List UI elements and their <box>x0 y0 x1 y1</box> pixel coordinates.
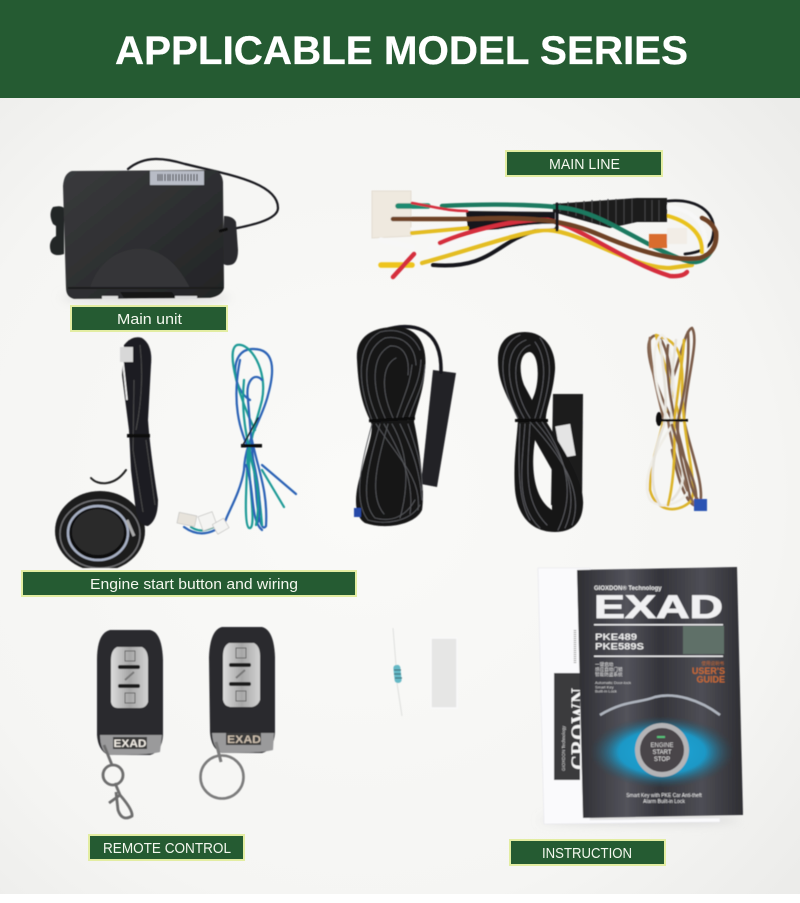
label: instruction: INSTRUCTION <box>542 845 632 862</box>
cover: Smart Key <box>595 684 614 690</box>
label: main line: MAIN LINE <box>549 156 620 173</box>
guide title: 使用说明书 <box>702 660 724 667</box>
label: main unit <box>71 306 227 331</box>
car thumbnail <box>683 626 724 654</box>
cover brand line: GIOXDON® Technology <box>594 585 662 592</box>
fob buttons <box>111 647 148 708</box>
main line wiring harness <box>372 191 716 277</box>
chinese feature lines: 一键启动 <box>595 661 614 668</box>
header banner <box>0 0 800 98</box>
title: APPLICABLE MODEL SERIES <box>115 29 688 73</box>
remote control two <box>200 627 275 798</box>
engine start icon: ENGINE <box>650 743 674 749</box>
white connector <box>372 191 411 238</box>
engine start icon <box>635 723 689 777</box>
module sticker <box>555 424 576 458</box>
wire connectors <box>177 512 229 534</box>
label: remote control: REMOTE CONTROL <box>103 840 231 857</box>
cover logo: EXAD <box>594 589 723 625</box>
cover: Alarm Built-in Lock <box>643 799 685 805</box>
cover <box>577 567 743 818</box>
main unit <box>50 159 278 303</box>
back booklet title: CROWN <box>566 688 591 770</box>
label: engine start button and wiring: Engine start button and wiring <box>90 576 298 593</box>
back pages <box>538 568 720 824</box>
cover: 智能防盗系统 <box>595 671 623 678</box>
key ring <box>200 742 244 798</box>
label: instruction <box>510 840 665 865</box>
label: engine start button and wiring <box>22 571 356 596</box>
cover: PKE589S <box>595 642 644 652</box>
fob buttons <box>223 643 260 707</box>
antenna coil two <box>498 332 583 532</box>
cover caption: Smart Key with PKE Car Anti-theft <box>626 793 702 799</box>
black conduit <box>553 198 667 228</box>
barcode sticker <box>150 171 204 185</box>
cover: GUIDE <box>696 674 725 684</box>
english feature lines: Automatic Door-lock <box>595 680 631 685</box>
label: main unit: Main unit <box>117 311 183 328</box>
cover: USER'S <box>692 666 725 676</box>
adhesive plate <box>431 638 457 708</box>
start button with cable <box>55 337 158 571</box>
key clasp <box>103 745 132 818</box>
back booklet brand: GIOXDON Technology <box>561 725 566 771</box>
engine start icon: STOP <box>654 757 670 763</box>
cover: Built-in Lock <box>595 688 617 694</box>
cover: 感应自动门锁 <box>595 666 623 673</box>
key fob brand: EXAD <box>114 738 147 750</box>
label: remote control <box>89 835 244 860</box>
instruction booklet <box>538 567 743 824</box>
resistor <box>393 628 402 716</box>
thin tri-colour coil <box>647 328 707 511</box>
model names: PKE489 <box>595 632 637 642</box>
label: main line <box>506 151 662 176</box>
orange and white terminals <box>649 234 667 248</box>
remote control one <box>97 630 163 818</box>
key fob brand: EXAD <box>227 734 261 746</box>
blue and green wires <box>177 345 296 534</box>
engine start icon: START <box>652 750 672 756</box>
button <box>55 491 145 571</box>
antenna coil one <box>354 327 456 526</box>
